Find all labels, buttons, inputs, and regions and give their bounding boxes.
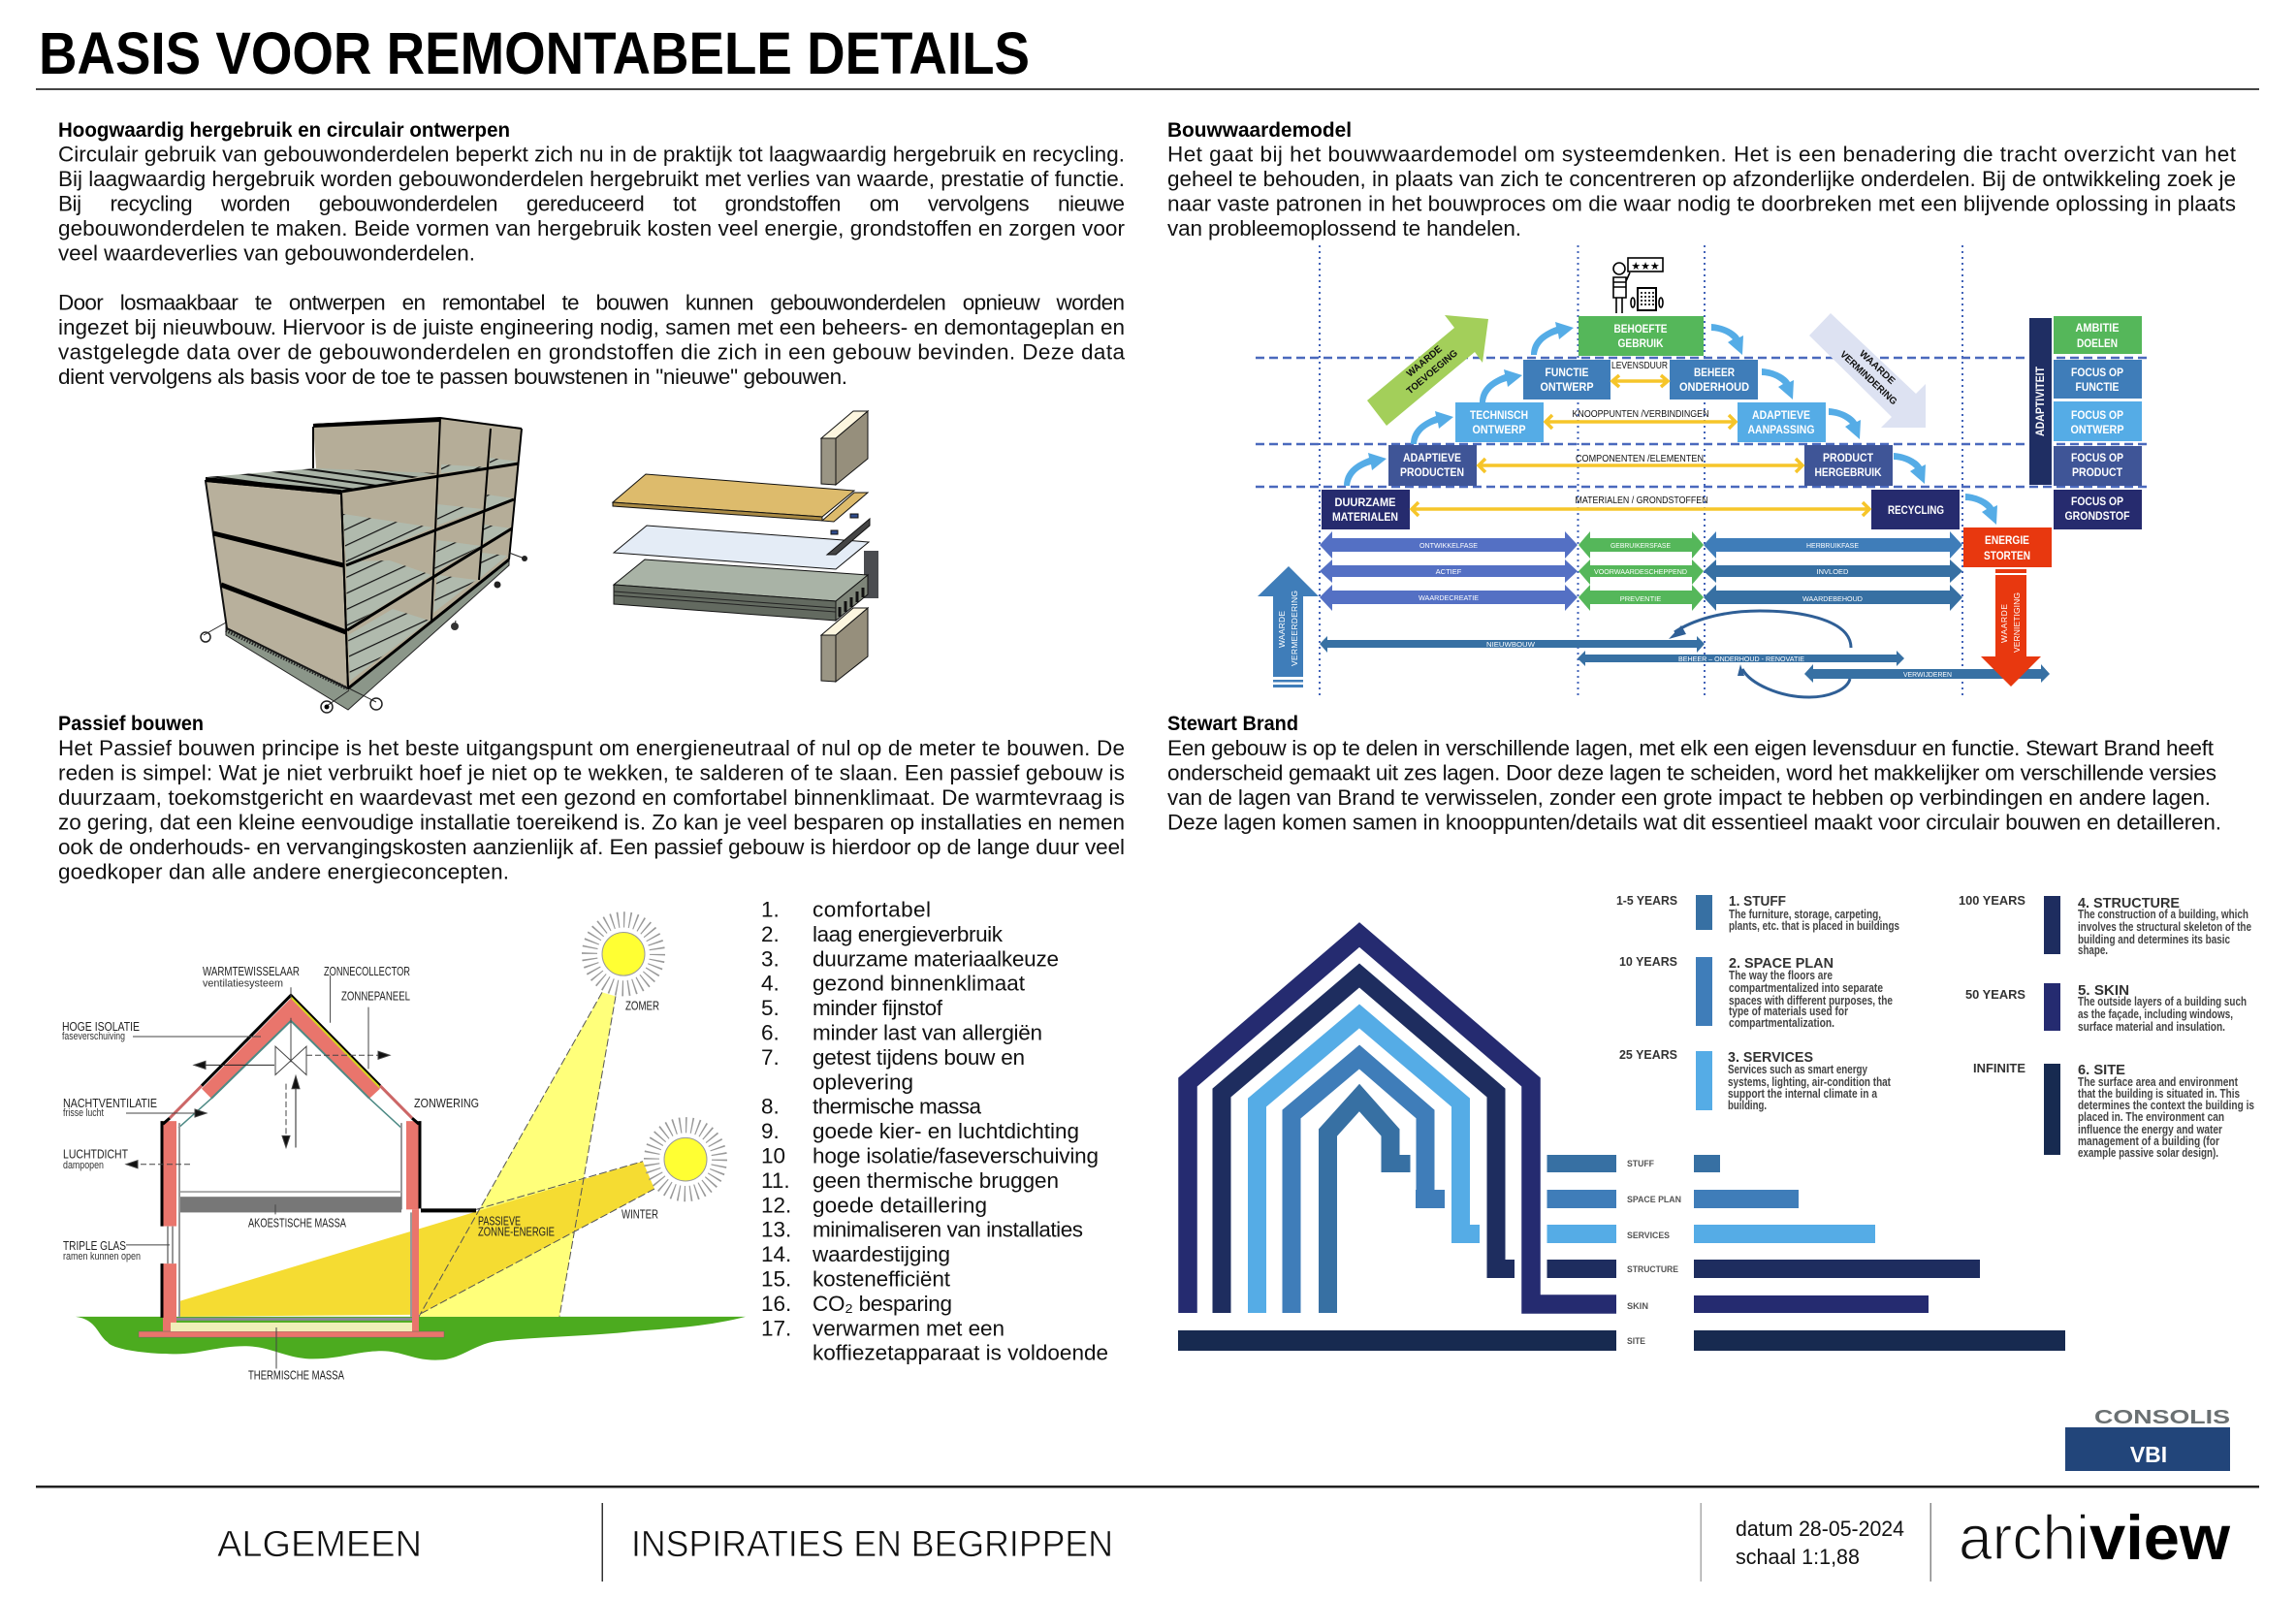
boxes: focus column: ADAPTIVITEIT bbox=[2035, 367, 2047, 436]
arrows: phase bands: ACTIEF bbox=[1436, 567, 1462, 576]
boxes: focus column: GRONDSTOF bbox=[2065, 511, 2129, 523]
legend: left column: systems, lighting, air-condition that bbox=[1728, 1075, 1892, 1089]
text block: hoogwaardig hergebruik: Circulair gebruik van gebouwonderdelen beperkt zich nu in de praktijk tot laagwaardig hergebruik en recycling. bbox=[58, 142, 1125, 167]
numbered list: passive building principles: minder last van allergiën bbox=[813, 1020, 1042, 1045]
arrow: waarde vernietiging: VERNIETIGING bbox=[2012, 592, 2022, 653]
arrows: lifecycle timelines bbox=[1320, 636, 2050, 683]
legend: right column: involves the structural skeleton of the bbox=[2078, 920, 2251, 934]
numbered list: passive building principles: CO₂ besparing bbox=[813, 1292, 952, 1316]
legend: left column: The way the floors are bbox=[1729, 969, 1833, 982]
numbered list: passive building principles: 7. bbox=[761, 1045, 780, 1070]
labels: house: THERMISCHE MASSA bbox=[248, 1368, 344, 1383]
chart: stewart brand house layers bbox=[1178, 893, 2254, 1351]
legend: left column: type of materials used for bbox=[1729, 1005, 1848, 1018]
arrows: lifecycle timelines: BEHEER – ONDERHOUD - RENOVATIE bbox=[1678, 655, 1804, 663]
boxes: value pyramid: GEBRUIK bbox=[1617, 338, 1664, 350]
numbered list: passive building principles: 2. bbox=[761, 922, 780, 946]
text block: stewart brand: onderscheid gemaakt uit zes lagen. Door deze lagen te scheiden, word het makkelijker om verschillende versies bbox=[1167, 760, 2216, 785]
arrows: phase bands: VOORWAARDESCHEPPEND bbox=[1594, 567, 1688, 576]
numbered list: passive building principles: 15. bbox=[761, 1266, 791, 1292]
arrow: waarde vermeerdering bbox=[1258, 566, 1319, 687]
legend: right column: INFINITE bbox=[1973, 1061, 2025, 1075]
numbered list: passive building principles: laag energieverbruik bbox=[813, 922, 1004, 946]
numbered list: passive building principles: goede detaillering bbox=[813, 1193, 987, 1217]
text block: bouwwaardemodel: Het gaat bij het bouwwaardemodel om systeemdenken. Het is een benadering die tracht overzicht van het bbox=[1167, 142, 2237, 167]
numbered list: passive building principles: verwarmen met een bbox=[813, 1316, 1004, 1340]
footer: archi bbox=[1959, 1502, 2089, 1573]
boxes: value pyramid: STORTEN bbox=[1984, 551, 2030, 562]
arrow: waarde vernietiging bbox=[1981, 569, 2041, 687]
title: BASIS VOOR REMONTABELE DETAILS bbox=[39, 20, 1030, 86]
arrows: phase bands: PREVENTIE bbox=[1620, 594, 1661, 603]
illustration: passive house section bbox=[62, 919, 746, 1383]
logo: consolis vbi: CONSOLIS bbox=[2094, 1407, 2230, 1428]
illustration: exploded floor detail bbox=[613, 411, 878, 682]
labels: house: HOGE ISOLATIE bbox=[62, 1019, 140, 1034]
numbered list: passive building principles: 10 bbox=[761, 1144, 785, 1167]
bar labels: STRUCTURE bbox=[1627, 1264, 1678, 1274]
text block: stewart brand: Een gebouw is op te delen in verschillende lagen, met elk een eigen levensduur en functie. Stewart Brand heeft bbox=[1167, 736, 2215, 760]
boxes: value pyramid: MATERIALEN bbox=[1332, 512, 1398, 524]
boxes: value pyramid: AANPASSING bbox=[1747, 425, 1815, 436]
legend: left column: 1. STUFF bbox=[1729, 893, 1786, 910]
numbered list: passive building principles: 3. bbox=[761, 946, 780, 971]
boxes: focus column: FUNCTIE bbox=[2075, 382, 2120, 394]
numbered list: passive building principles: geen thermische bruggen bbox=[813, 1168, 1059, 1193]
text block: passief bouwen: goedkoper dan alle andere energieconcepten. bbox=[58, 860, 509, 884]
legend: left column: plants, etc. that is placed in buildings bbox=[1729, 919, 1899, 933]
arrow: waarde toevoeging: TOEVOEGING bbox=[1405, 348, 1460, 397]
legend: left column: 3. SERVICES bbox=[1728, 1049, 1813, 1066]
legend: left column: 1-5 YEARS bbox=[1616, 893, 1677, 908]
legend: right column: The construction of a building, which bbox=[2078, 908, 2248, 921]
boxes: value pyramid: ENERGIE bbox=[1985, 535, 2029, 547]
text block: passief bouwen: duurzaam, toekomstgericht en waardevast met een gezond en comfortabel binnenklimaat. De warmtevraag is bbox=[58, 785, 1125, 810]
legend: right column: that the building is situated in. This bbox=[2078, 1087, 2240, 1101]
layer: stuff bbox=[1328, 1098, 1616, 1313]
bar labels: SKIN bbox=[1627, 1301, 1648, 1311]
layer: skin bbox=[1188, 935, 1616, 1313]
arrow: waarde vernietiging: WAARDE bbox=[1999, 604, 2009, 643]
text block: hoogwaardig hergebruik: dient vervolgens als basis voor de toe te passen bouwstenen in "nieuwe" gebouwen. bbox=[58, 365, 847, 389]
bar labels: STUFF bbox=[1627, 1159, 1654, 1168]
lifespan bars bbox=[1694, 1155, 2065, 1351]
legend: right column: The outside layers of a building such bbox=[2078, 995, 2247, 1008]
legend: left column: building. bbox=[1728, 1099, 1767, 1112]
labels: house: ZONNEPANEEL bbox=[341, 988, 410, 1004]
labels: house: ZOMER bbox=[625, 999, 659, 1013]
numbered list: passive building principles: hoge isolatie/faseverschuiving bbox=[813, 1144, 1099, 1167]
legend: left column: 25 YEARS bbox=[1619, 1047, 1677, 1062]
logo: consolis vbi bbox=[2065, 1407, 2230, 1471]
arrows: lifecycle timelines: VERWIJDEREN bbox=[1903, 670, 1952, 679]
text block: bouwwaardemodel: van probleemoplossend te handelen. bbox=[1167, 216, 1521, 240]
boxes: focus column: ONTWERP bbox=[2071, 425, 2124, 436]
layer: structure bbox=[1222, 975, 1616, 1313]
labels: house: WARMTEWISSELAAR bbox=[203, 964, 300, 978]
footer: schaal 1:1,88 bbox=[1736, 1545, 1860, 1569]
labels: house: WINTER bbox=[622, 1206, 658, 1222]
legend: right column: shape. bbox=[2078, 943, 2108, 957]
legend: right column bbox=[1959, 893, 2254, 1160]
text block: bouwwaardemodel: geheel te behouden, in plaats van zich te concentreren op afzonderlijke onderdelen. Bij de ontwikkeling zoek je bbox=[1167, 167, 2236, 191]
arrows: renovation loops bbox=[1669, 611, 1851, 697]
layer: space plan bbox=[1292, 1057, 1616, 1313]
boxes: value pyramid: FUNCTIE bbox=[1546, 368, 1589, 379]
text block: bouwwaardemodel: naar vaste patronen in het bouwproces om die waar nodig te doorbreken met een blijvende oplossing in plaats bbox=[1167, 192, 2236, 215]
text block: passief bouwen: Het Passief bouwen principe is het beste uitgangspunt om energieneutraal of nul op de meter te bouwen. De bbox=[58, 736, 1125, 760]
legend: right column: 6. SITE bbox=[2078, 1062, 2125, 1078]
labels: scales: COMPONENTEN /ELEMENTEN bbox=[1576, 454, 1704, 464]
labels: house bbox=[62, 964, 659, 1383]
labels: house: AKOESTISCHE MASSA bbox=[248, 1216, 346, 1230]
numbered list: passive building principles: goede kier- en luchtdichting bbox=[813, 1119, 1079, 1143]
labels: house: frisse lucht bbox=[63, 1107, 104, 1119]
arrow: waarde vermindering: WAARDE bbox=[1857, 348, 1897, 387]
boxes: focus column: FOCUS OP bbox=[2071, 410, 2123, 422]
boxes: focus column: FOCUS OP bbox=[2071, 453, 2123, 464]
boxes: value pyramid: BEHOEFTE bbox=[1613, 324, 1668, 336]
legend: left column: compartmentalized into separate bbox=[1729, 981, 1883, 995]
legend: left column bbox=[1616, 893, 1899, 1112]
legend: left column: support the internal climate in a bbox=[1728, 1087, 1878, 1101]
legend: left column: 10 YEARS bbox=[1619, 954, 1677, 969]
boxes: focus column: FOCUS OP bbox=[2071, 368, 2123, 379]
legend: right column: 5. SKIN bbox=[2078, 982, 2129, 999]
arrow: waarde vermindering: VERMINDERING bbox=[1837, 349, 1898, 407]
boxes: focus column: AMBITIE bbox=[2075, 323, 2120, 335]
legend: right column: building and determines its basic bbox=[2078, 933, 2230, 946]
numbered list: passive building principles: duurzame materiaalkeuze bbox=[813, 946, 1059, 971]
text block: bouwwaardemodel bbox=[1167, 119, 2237, 240]
boxes: focus column: DOELEN bbox=[2077, 338, 2118, 350]
legend: left column: 2. SPACE PLAN bbox=[1729, 955, 1834, 972]
numbered list: passive building principles: comfortabel bbox=[813, 898, 931, 921]
text block: hoogwaardig hergebruik: vastgelegde data over de gebouwonderdelen en grondstoffen die zich in een gebouw bevinden. Deze data bbox=[58, 339, 1125, 365]
legend: left column: Services such as smart energy bbox=[1728, 1063, 1867, 1076]
bar labels bbox=[1627, 1159, 1681, 1346]
text block: passief bouwen: Passief bouwen bbox=[58, 713, 204, 735]
text block: stewart brand: Deze lagen komen samen in knooppunten/details wat dit essentieel maakt voor circulair bouwen en detailleren. bbox=[1167, 811, 2221, 835]
arrow: waarde toevoeging: WAARDE bbox=[1405, 344, 1445, 379]
arrow: waarde toevoeging bbox=[1367, 315, 1488, 426]
logo: consolis vbi: VBI bbox=[2130, 1442, 2167, 1467]
numbered list: passive building principles: 13. bbox=[761, 1218, 791, 1242]
numbered list: passive building principles bbox=[761, 898, 1108, 1365]
arrows: phase bands: WAARDEBEHOUD bbox=[1802, 594, 1864, 603]
text block: hoogwaardig hergebruik: Hoogwaardig hergebruik en circulair ontwerpen bbox=[58, 119, 510, 142]
labels: house: NACHTVENTILATIE bbox=[63, 1096, 157, 1110]
numbered list: passive building principles: 1. bbox=[761, 898, 780, 921]
legend: right column: surface material and insulation. bbox=[2078, 1020, 2225, 1034]
text block: hoogwaardig hergebruik: Door losmaakbaar te ontwerpen en remontabel te bouwen kunnen gebouwonderdelen opnieuw worden bbox=[58, 291, 1125, 314]
numbered list: passive building principles: 6. bbox=[761, 1020, 780, 1045]
chart: bouwwaardemodel diagram bbox=[1256, 245, 2147, 698]
text block: stewart brand bbox=[1167, 713, 2221, 835]
labels: house: ramen kunnen open bbox=[63, 1251, 141, 1262]
legend: left column: The furniture, storage, carpeting, bbox=[1729, 908, 1881, 921]
footer: datum 28-05-2024 bbox=[1736, 1517, 1904, 1541]
arrow: waarde vermindering bbox=[1809, 313, 1926, 428]
labels: house: ZONNECOLLECTOR bbox=[324, 964, 410, 978]
numbered list: passive building principles: 9. bbox=[761, 1119, 780, 1143]
text block: hoogwaardig hergebruik: veel waardeverlies van gebouwonderdelen. bbox=[58, 240, 475, 266]
boxes: value pyramid: HERGEBRUIK bbox=[1815, 467, 1882, 479]
layer: services bbox=[1257, 1016, 1616, 1313]
labels: scales: KNOOPPUNTEN /VERBINDINGEN bbox=[1573, 409, 1708, 420]
guide lines bbox=[1320, 245, 1962, 698]
layer: site bbox=[1178, 1330, 1616, 1351]
numbered list: passive building principles: 14. bbox=[761, 1242, 791, 1266]
arrows: circular flow bbox=[1344, 322, 1997, 525]
text block: hoogwaardig hergebruik: gebouwonderdelen te maken. Beide vormen van hergebruik kosten veel energie, grondstoffen en zorgen voor bbox=[58, 216, 1125, 240]
icon: person with rating bbox=[1613, 258, 1663, 313]
illustration: 3D building frame bbox=[201, 418, 527, 713]
boxes: value pyramid: PRODUCT bbox=[1823, 453, 1873, 464]
labels: house: TRIPLE GLAS bbox=[63, 1238, 126, 1253]
legend: right column: The surface area and environment bbox=[2078, 1075, 2239, 1089]
legend: right column: as the façade, including windows, bbox=[2078, 1007, 2233, 1021]
labels: house: PASSIEVE bbox=[478, 1213, 521, 1229]
numbered list: passive building principles: minimaliseren van installaties bbox=[813, 1218, 1083, 1242]
boxes: value pyramid: ADAPTIEVE bbox=[1752, 410, 1810, 422]
labels: house: dampopen bbox=[63, 1160, 104, 1171]
numbered list: passive building principles: thermische massa bbox=[813, 1095, 981, 1119]
boxes: focus column bbox=[2029, 316, 2142, 529]
boxes: value pyramid bbox=[1322, 316, 2052, 567]
ground bbox=[76, 1317, 746, 1360]
labels: house: ventilatiesysteem bbox=[203, 977, 283, 989]
text block: passief bouwen: ook de onderhouds- en vervangingskosten aanzienlijk af. Een passief gebouw is hierdoor op de lange duur veel bbox=[58, 835, 1125, 859]
text block: stewart brand: van de lagen van Brand te verwisselen, zonder een grote impact te hebben op verbindingen en andere lagen. bbox=[1167, 785, 2211, 810]
numbered list: passive building principles: 5. bbox=[761, 996, 780, 1020]
arrows: phase bands: ONTWIKKELFASE bbox=[1419, 541, 1478, 550]
labels: house: LUCHTDICHT bbox=[63, 1147, 128, 1162]
boxes: value pyramid: ONDERHOUD bbox=[1679, 382, 1749, 394]
text block: hoogwaardig hergebruik: Bij laagwaardig hergebruik worden gebouwonderdelen hergebruikt met verlies van waarde, prestatie of functie. bbox=[58, 167, 1125, 191]
numbered list: passive building principles: minder fijnstof bbox=[813, 996, 943, 1020]
boxes: value pyramid: BEHEER bbox=[1694, 368, 1736, 379]
footer: ALGEMEEN bbox=[217, 1524, 422, 1565]
labels: scales: LEVENSDUUR bbox=[1611, 361, 1668, 371]
legend: right column: 4. STRUCTURE bbox=[2078, 895, 2180, 911]
house structure bbox=[139, 995, 476, 1337]
arrows: phase bands: HERBRUIKFASE bbox=[1806, 541, 1859, 550]
bar labels: SERVICES bbox=[1627, 1230, 1670, 1240]
numbered list: passive building principles: kostenefficiënt bbox=[813, 1266, 951, 1292]
labels: scales bbox=[1573, 361, 1708, 506]
boxes: value pyramid: ONTWERP bbox=[1540, 382, 1594, 394]
text block: passief bouwen: reden is simpel: Wat je niet verbruikt hoef je niet op te wekken, te salderen of te slaan. Een passief gebouw is bbox=[58, 760, 1125, 785]
legend: left column: compartmentalization. bbox=[1729, 1016, 1834, 1030]
legend: right column: placed in. The environment can bbox=[2078, 1110, 2224, 1124]
text block: stewart brand: Stewart Brand bbox=[1167, 713, 1298, 735]
text block: bouwwaardemodel: Bouwwaardemodel bbox=[1167, 119, 1352, 142]
suns bbox=[590, 919, 719, 1194]
text block: hoogwaardig hergebruik: ingezet bij nieuwbouw. Hiervoor is de juiste engineering nodig, samen met een beheers- en demontageplan en bbox=[58, 315, 1125, 339]
numbered list: passive building principles: 8. bbox=[761, 1095, 780, 1119]
numbered list: passive building principles: waardestijging bbox=[812, 1242, 950, 1266]
arrows: phase bands bbox=[1320, 531, 1962, 611]
boxes: value pyramid: ADAPTIEVE bbox=[1403, 453, 1461, 464]
arrows: phase bands: INVLOED bbox=[1817, 567, 1849, 576]
legend: right column: management of a building (for bbox=[2078, 1135, 2219, 1148]
text block: passief bouwen bbox=[58, 713, 1125, 884]
boxes: focus column: FOCUS OP bbox=[2071, 496, 2123, 508]
labels: house: ZONNE-ENERGIE bbox=[478, 1225, 555, 1239]
boxes: value pyramid: ONTWERP bbox=[1472, 425, 1526, 436]
boxes: value pyramid: RECYCLING bbox=[1888, 505, 1944, 517]
arrows: lifecycle timelines: NIEUWBOUW bbox=[1486, 640, 1536, 649]
legend: right column: example passive solar design). bbox=[2078, 1146, 2218, 1160]
footer: INSPIRATIES EN BEGRIPPEN bbox=[631, 1524, 1113, 1565]
arrow: waarde vermeerdering: WAARDE bbox=[1277, 611, 1287, 648]
numbered list: passive building principles: koffiezetapparaat is voldoende bbox=[813, 1341, 1108, 1365]
boxes: value pyramid: DUURZAME bbox=[1334, 497, 1396, 509]
ventilation and leader lines bbox=[126, 975, 390, 1369]
numbered list: passive building principles: getest tijdens bouw en bbox=[813, 1045, 1025, 1070]
text block: hoogwaardig hergebruik: Bij recycling worden gebouwonderdelen gereduceerd tot grondstoffen om vervolgens nieuwe bbox=[58, 192, 1125, 215]
arrow: waarde vermeerdering: VERMEERDERING bbox=[1290, 591, 1299, 666]
text block: passief bouwen: zo gering, dat een kleine eenvoudige installatie toereikend is. Zo kan je veel besparen op installaties en nemen bbox=[58, 811, 1125, 835]
numbered list: passive building principles: gezond binnenklimaat bbox=[813, 972, 1026, 996]
legend: left column: spaces with different purposes, the bbox=[1729, 994, 1893, 1007]
sun beams bbox=[419, 992, 616, 1317]
boxes: value pyramid: PRODUCTEN bbox=[1400, 467, 1464, 479]
numbered list: passive building principles: 16. bbox=[761, 1292, 791, 1316]
icon: person with rating: ★★★ bbox=[1631, 261, 1660, 272]
boxes: focus column: PRODUCT bbox=[2072, 467, 2122, 479]
legend: right column: determines the context the building is bbox=[2078, 1099, 2254, 1112]
legend: right column: 50 YEARS bbox=[1965, 987, 2025, 1002]
bar labels: SPACE PLAN bbox=[1627, 1195, 1681, 1204]
labels: house: ZONWERING bbox=[414, 1096, 479, 1110]
legend: right column: influence the energy and water bbox=[2078, 1123, 2222, 1136]
footer bbox=[36, 1486, 2259, 1582]
arrows: phase bands: GEBRUIKERSFASE bbox=[1610, 541, 1671, 550]
labels: scales: MATERIALEN / GRONDSTOFFEN bbox=[1575, 495, 1708, 506]
numbered list: passive building principles: 4. bbox=[761, 972, 780, 996]
arrows: yellow double-headed scales bbox=[1412, 375, 1869, 516]
text block: hoogwaardig hergebruik bbox=[58, 119, 1125, 389]
bar labels: SITE bbox=[1627, 1336, 1645, 1346]
numbered list: passive building principles: 12. bbox=[761, 1193, 791, 1217]
footer: view bbox=[2089, 1502, 2230, 1573]
numbered list: passive building principles: oplevering bbox=[813, 1070, 913, 1094]
legend: right column: 100 YEARS bbox=[1959, 893, 2025, 908]
numbered list: passive building principles: 17. bbox=[761, 1316, 791, 1340]
boxes: value pyramid: TECHNISCH bbox=[1470, 410, 1528, 422]
numbered list: passive building principles: 11. bbox=[761, 1168, 790, 1193]
labels: house: faseverschuiving bbox=[62, 1031, 125, 1042]
arrows: phase bands: WAARDECREATIE bbox=[1419, 593, 1479, 602]
